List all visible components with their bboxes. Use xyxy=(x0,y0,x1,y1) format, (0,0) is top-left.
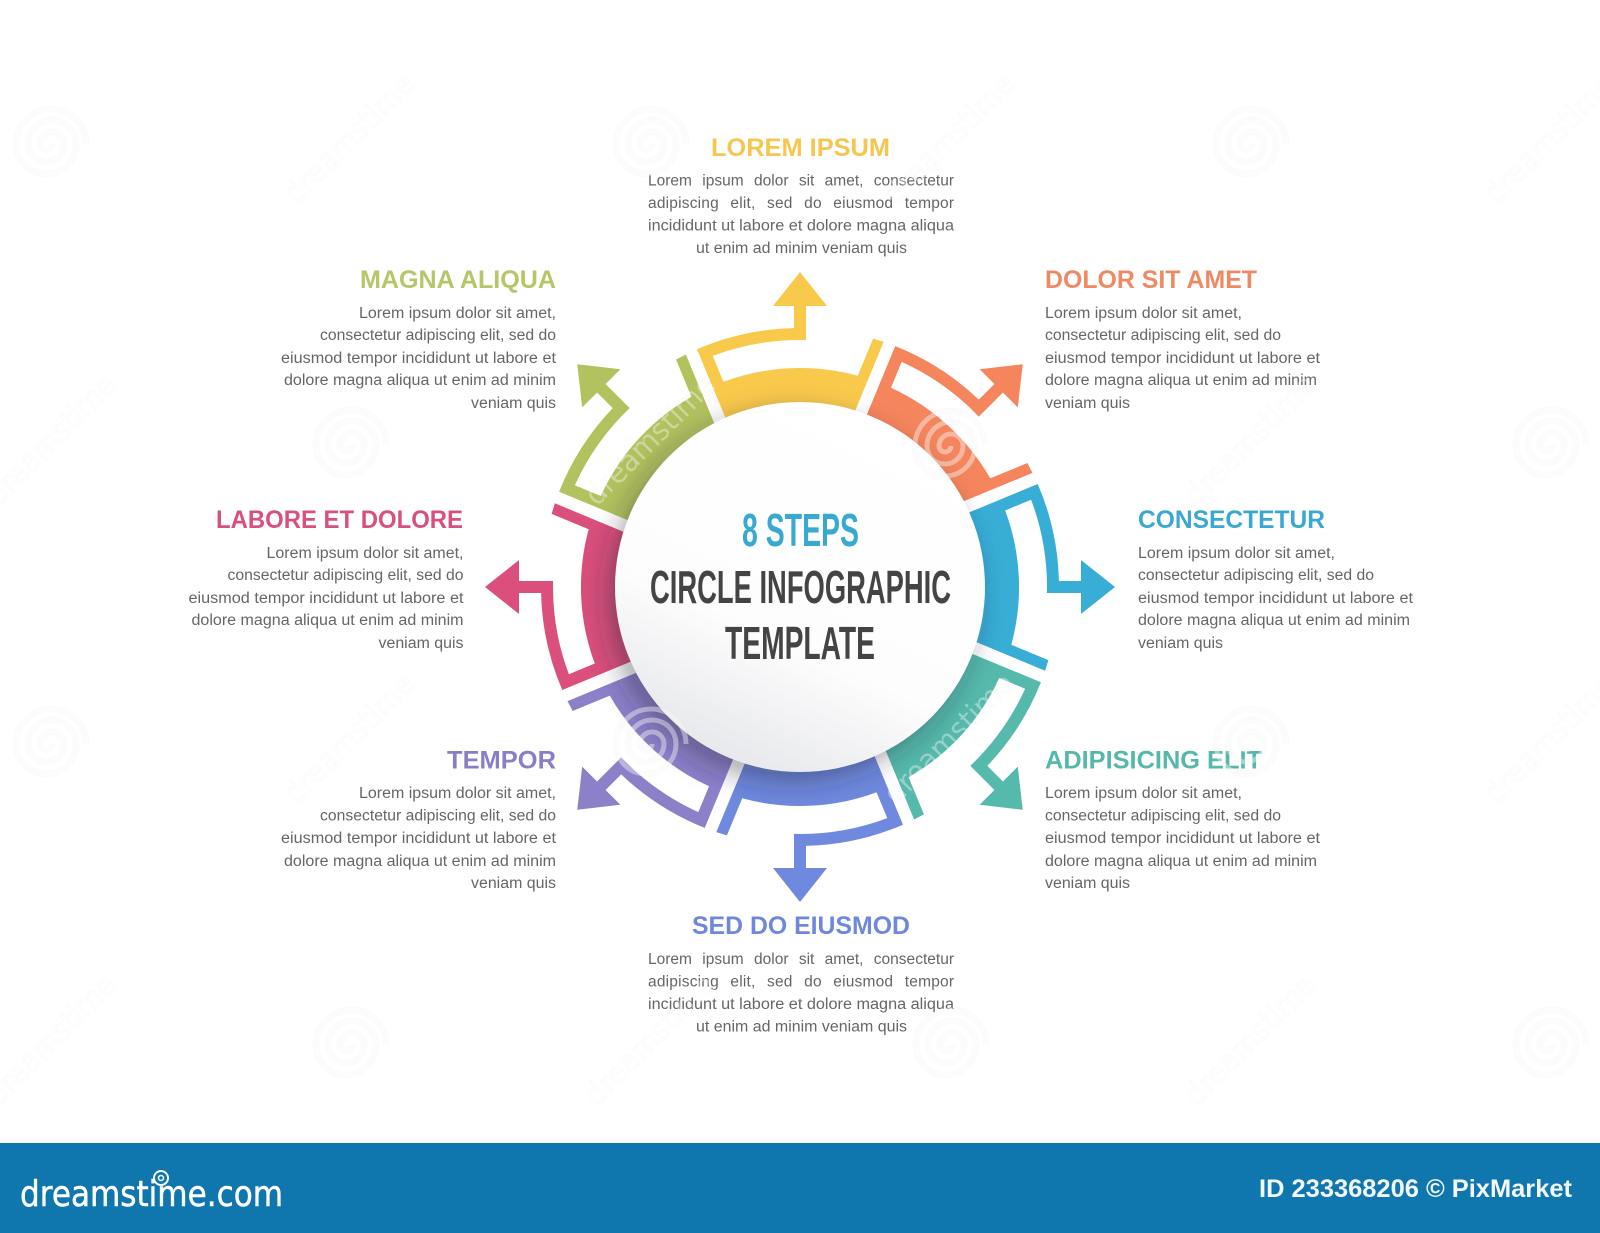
watermark overlay: dreamstime xyxy=(1178,368,1323,513)
center heading xyxy=(650,504,951,669)
body: Lorem ipsum dolor sit amet, xyxy=(1138,545,1335,562)
title: LOREM IPSUM xyxy=(711,134,890,162)
body: consectetur adipiscing elit, sed do xyxy=(320,327,556,344)
arrow segment: orange, upper right xyxy=(840,291,1082,533)
arrow segment: purple, lower left xyxy=(518,641,760,883)
body xyxy=(281,305,557,412)
body: veniam quis xyxy=(471,395,556,412)
watermark overlay: dreamstime xyxy=(277,667,422,812)
heading line: template: TEMPLATE xyxy=(725,617,875,669)
body: consectetur adipiscing elit, sed do xyxy=(1045,327,1281,344)
body: incididunt ut labore et dolore magna aliqua xyxy=(648,996,954,1013)
body: Lorem ipsum dolor sit amet, consectetur xyxy=(648,172,954,190)
body: dolore magna aliqua ut enim ad minim xyxy=(284,853,556,870)
body: Lorem ipsum dolor sit amet, xyxy=(359,785,556,802)
body: Lorem ipsum dolor sit amet, xyxy=(1045,785,1242,802)
body: veniam quis xyxy=(1045,395,1130,412)
title: ADIPISICING ELIT xyxy=(1045,746,1262,774)
body: eiusmod tempor incididunt ut labore et xyxy=(188,590,464,607)
body: veniam quis xyxy=(1138,635,1223,652)
body: eiusmod tempor incididunt ut labore et xyxy=(1045,350,1321,367)
body xyxy=(1138,545,1414,652)
body: adipiscing elit, sed do eiusmod tempor xyxy=(648,974,954,990)
text block: labore et dolore xyxy=(188,506,464,652)
heading line: 8 steps: 8 STEPS xyxy=(742,504,859,556)
body: consectetur adipiscing elit, sed do xyxy=(1045,808,1281,824)
watermark overlay: dreamstime xyxy=(578,368,723,513)
body: Lorem ipsum dolor sit amet, consectetur xyxy=(648,951,954,968)
body: veniam quis xyxy=(378,635,464,652)
body: consectetur adipiscing elit, sed do xyxy=(1138,567,1374,584)
arrow segment: periwinkle, down xyxy=(716,747,903,902)
body: dolore magna aliqua ut enim ad minim xyxy=(1045,372,1317,389)
watermark overlay: dreamstime xyxy=(578,968,723,1113)
watermark overlay: dreamstime xyxy=(277,67,422,212)
body: ut enim ad minim veniam quis xyxy=(696,1018,907,1036)
body: eiusmod tempor incididunt ut labore et xyxy=(1138,590,1414,607)
body: dolore magna aliqua ut enim ad minim xyxy=(284,372,556,389)
body: dolore magna aliqua ut enim ad minim xyxy=(1138,612,1410,629)
title: TEMPOR xyxy=(447,746,556,774)
text block: magna aliqua xyxy=(281,266,557,412)
logo: dreamstime.com xyxy=(20,1174,283,1215)
title: CONSECTETUR xyxy=(1138,506,1325,534)
body xyxy=(648,172,954,257)
title: MAGNA ALIQUA xyxy=(360,266,556,294)
body xyxy=(1045,305,1321,412)
watermark overlay: dreamstime xyxy=(1178,968,1323,1113)
text block: adipisicing elit xyxy=(1045,746,1321,892)
arrow segment: blue, right xyxy=(960,484,1115,671)
watermark overlay: dreamstime xyxy=(877,67,1022,212)
body xyxy=(281,785,557,892)
body: dolore magna aliqua ut enim ad minim xyxy=(1045,853,1317,870)
image id and credit: ID 233368206 © PixMarket xyxy=(1259,1175,1573,1203)
title: DOLOR SIT AMET xyxy=(1045,266,1257,294)
body xyxy=(188,545,464,652)
title: SED DO EIUSMOD xyxy=(692,912,910,940)
body: veniam quis xyxy=(1045,875,1130,892)
body: Lorem ipsum dolor sit amet, xyxy=(359,305,556,322)
arrow segment: yellow, up xyxy=(697,272,884,427)
body: veniam quis xyxy=(471,875,556,892)
heading line: circle infographic: CIRCLE INFOGRAPHIC xyxy=(650,561,951,613)
circular arrow ring xyxy=(485,272,1115,902)
body: eiusmod tempor incididunt ut labore et xyxy=(1045,830,1321,847)
body xyxy=(648,951,954,1036)
body: dolore magna aliqua ut enim ad minim xyxy=(192,612,464,629)
arrow segment: teal, lower right xyxy=(854,627,1096,869)
text block: dolor sit amet xyxy=(1045,266,1321,412)
footer banner xyxy=(0,1143,1600,1233)
watermark overlay: dreamstime xyxy=(877,667,1022,812)
body: Lorem ipsum dolor sit amet, xyxy=(1045,305,1242,322)
text block: lorem ipsum xyxy=(648,134,954,257)
arrow segment: green, upper left xyxy=(504,305,746,547)
body: consectetur adipiscing elit, sed do xyxy=(320,808,556,824)
title: LABORE ET DOLORE xyxy=(216,506,463,534)
body: eiusmod tempor incididunt ut labore et xyxy=(281,830,557,847)
text block: sed do eiusmod xyxy=(648,912,954,1036)
center circle xyxy=(607,402,985,782)
text block: consectetur xyxy=(1138,506,1414,652)
text block: tempor xyxy=(281,746,557,892)
body: consectetur adipiscing elit, sed do xyxy=(228,567,464,584)
body: Lorem ipsum dolor sit amet, xyxy=(266,545,464,562)
body: adipiscing elit, sed do eiusmod tempor xyxy=(648,195,954,212)
arrow segment: pink, left xyxy=(485,503,640,690)
body: incididunt ut labore et dolore magna aliqua xyxy=(648,218,954,234)
body: ut enim ad minim veniam quis xyxy=(696,240,907,257)
body xyxy=(1045,785,1321,892)
body: eiusmod tempor incididunt ut labore et xyxy=(281,350,557,367)
